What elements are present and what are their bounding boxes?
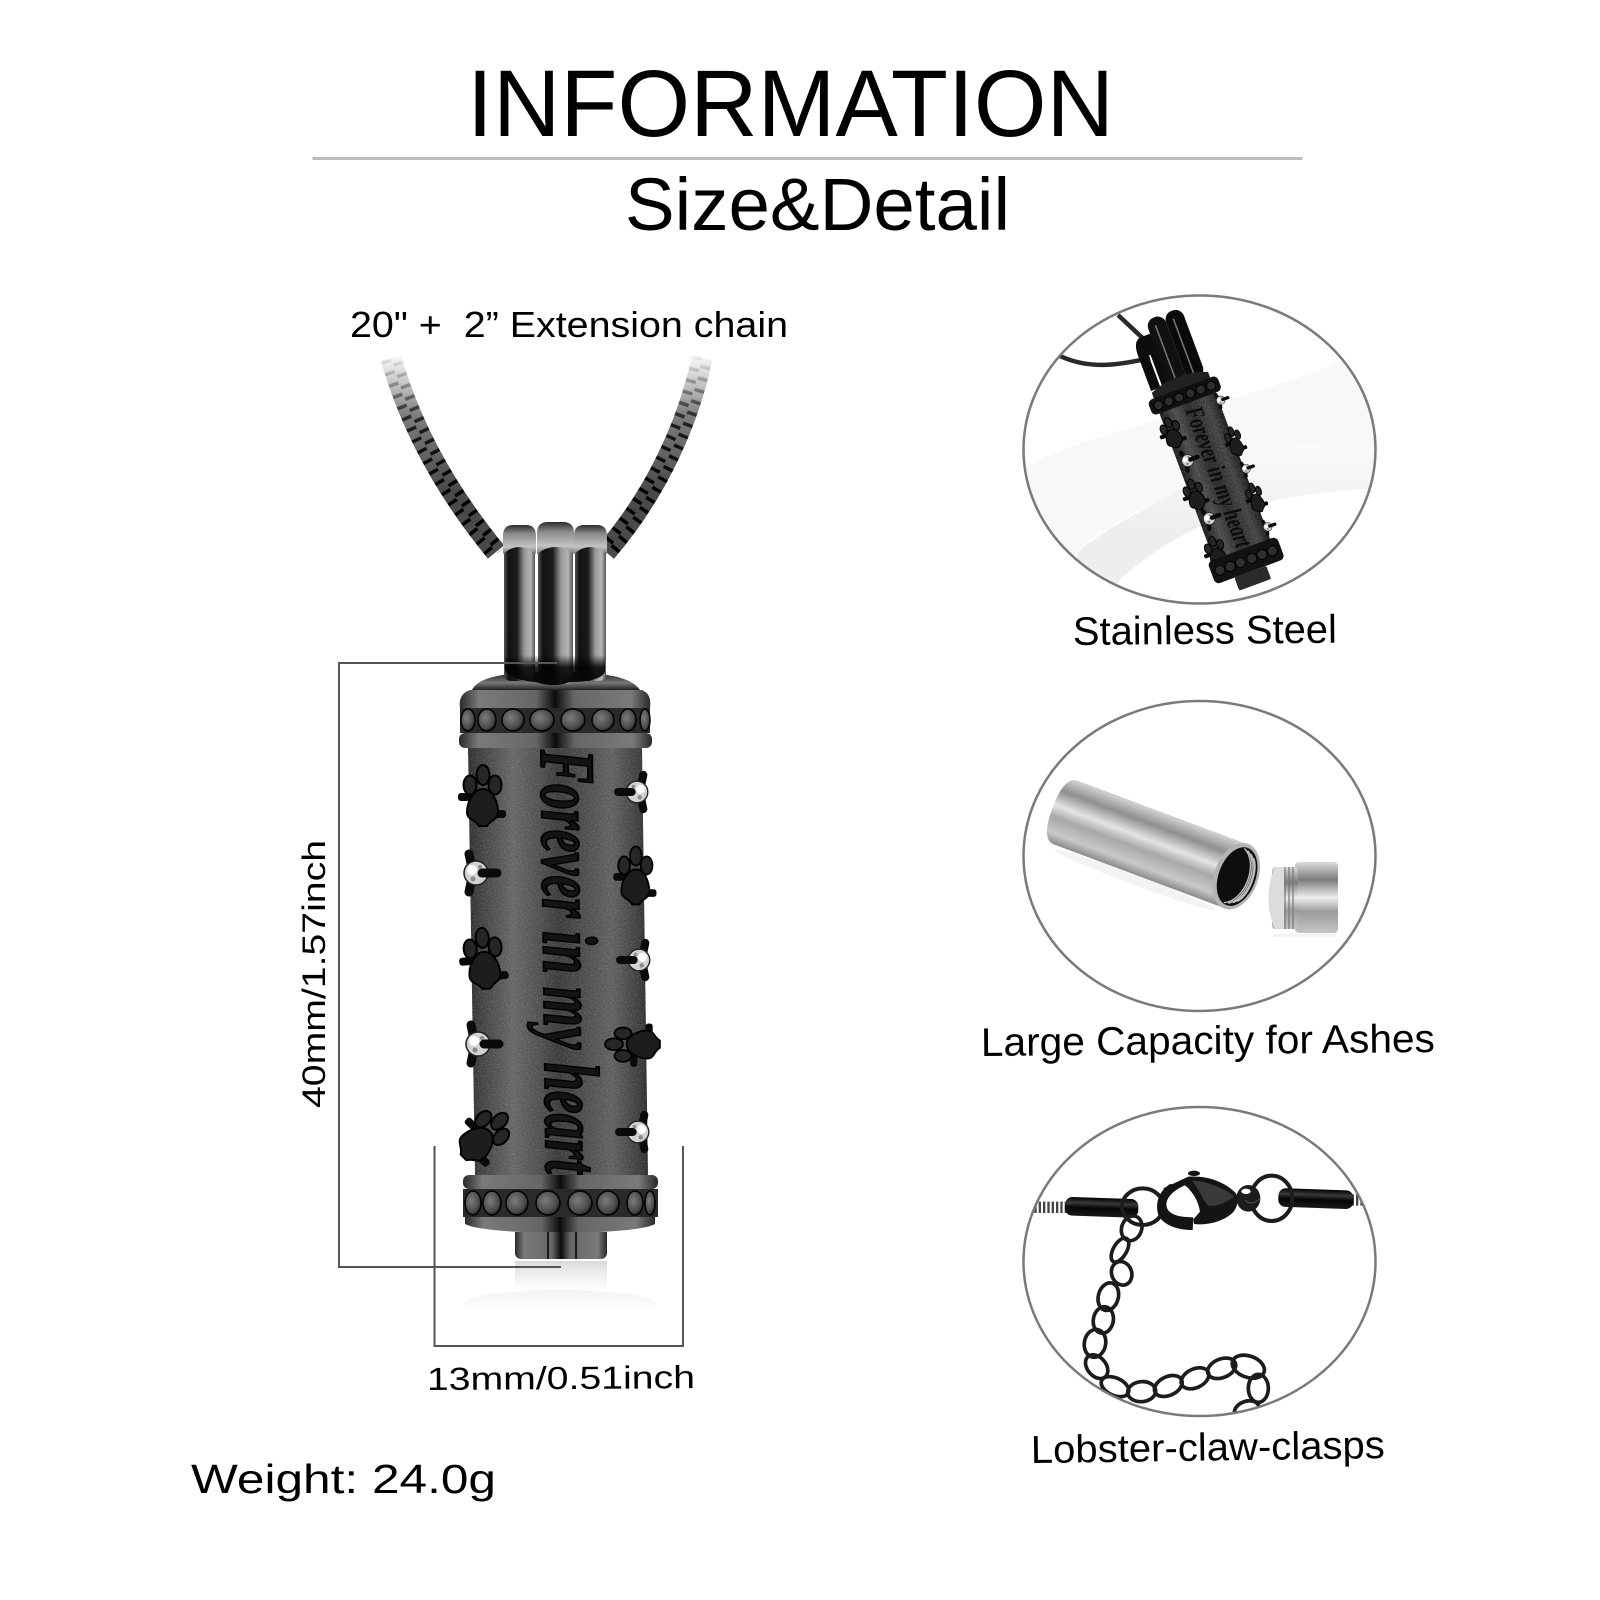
capacity label: Large Capacity for Ashes: [981, 1017, 1435, 1065]
top cap: [459, 672, 652, 748]
detail circle: clasp: [1020, 1104, 1380, 1422]
subtitle: Size&Detail: [625, 163, 1010, 246]
weight label: Weight: 24.0g: [191, 1456, 496, 1502]
bottom cap: [463, 1175, 658, 1259]
clasp label: Lobster-claw-clasps: [1031, 1424, 1385, 1472]
cylinder body: [468, 748, 648, 1175]
stainless steel label: Stainless Steel: [1073, 608, 1337, 654]
crimp tubes: [1065, 1197, 1139, 1218]
pendant bail: [503, 522, 607, 685]
pendant necklace photo: [386, 356, 707, 1312]
gems: [464, 775, 650, 1149]
threaded cap: [1268, 862, 1338, 937]
jump rings: [1122, 1188, 1163, 1225]
lobster clasp: [1157, 1171, 1260, 1230]
height label: 40mm/1.57inch: [296, 840, 332, 1108]
snake chain ends: [1030, 1200, 1373, 1207]
chain length label: 20" + 2” Extension chain: [350, 304, 788, 345]
tilted pendant: [1136, 310, 1284, 590]
open tube: [1046, 780, 1260, 910]
extension chain links: [1081, 1213, 1268, 1422]
floor reflection: [465, 1261, 655, 1312]
width label: 13mm/0.51inch: [427, 1359, 695, 1397]
paw charms right: [605, 846, 660, 1067]
detail circle: stainless steel: [1020, 290, 1380, 610]
title: INFORMATION: [467, 51, 1114, 157]
engraved script: Forever in my heart: [524, 748, 616, 1176]
tilted pendant: Forever in my heart: [1179, 402, 1258, 552]
height dimension bracket: [339, 663, 561, 1267]
chain: [1060, 315, 1150, 365]
title divider: [312, 157, 1302, 160]
detail circle: capacity: [1020, 698, 1380, 1014]
chain: [386, 356, 707, 554]
paw charms left: [446, 765, 523, 1174]
width dimension bracket: [434, 1146, 683, 1346]
